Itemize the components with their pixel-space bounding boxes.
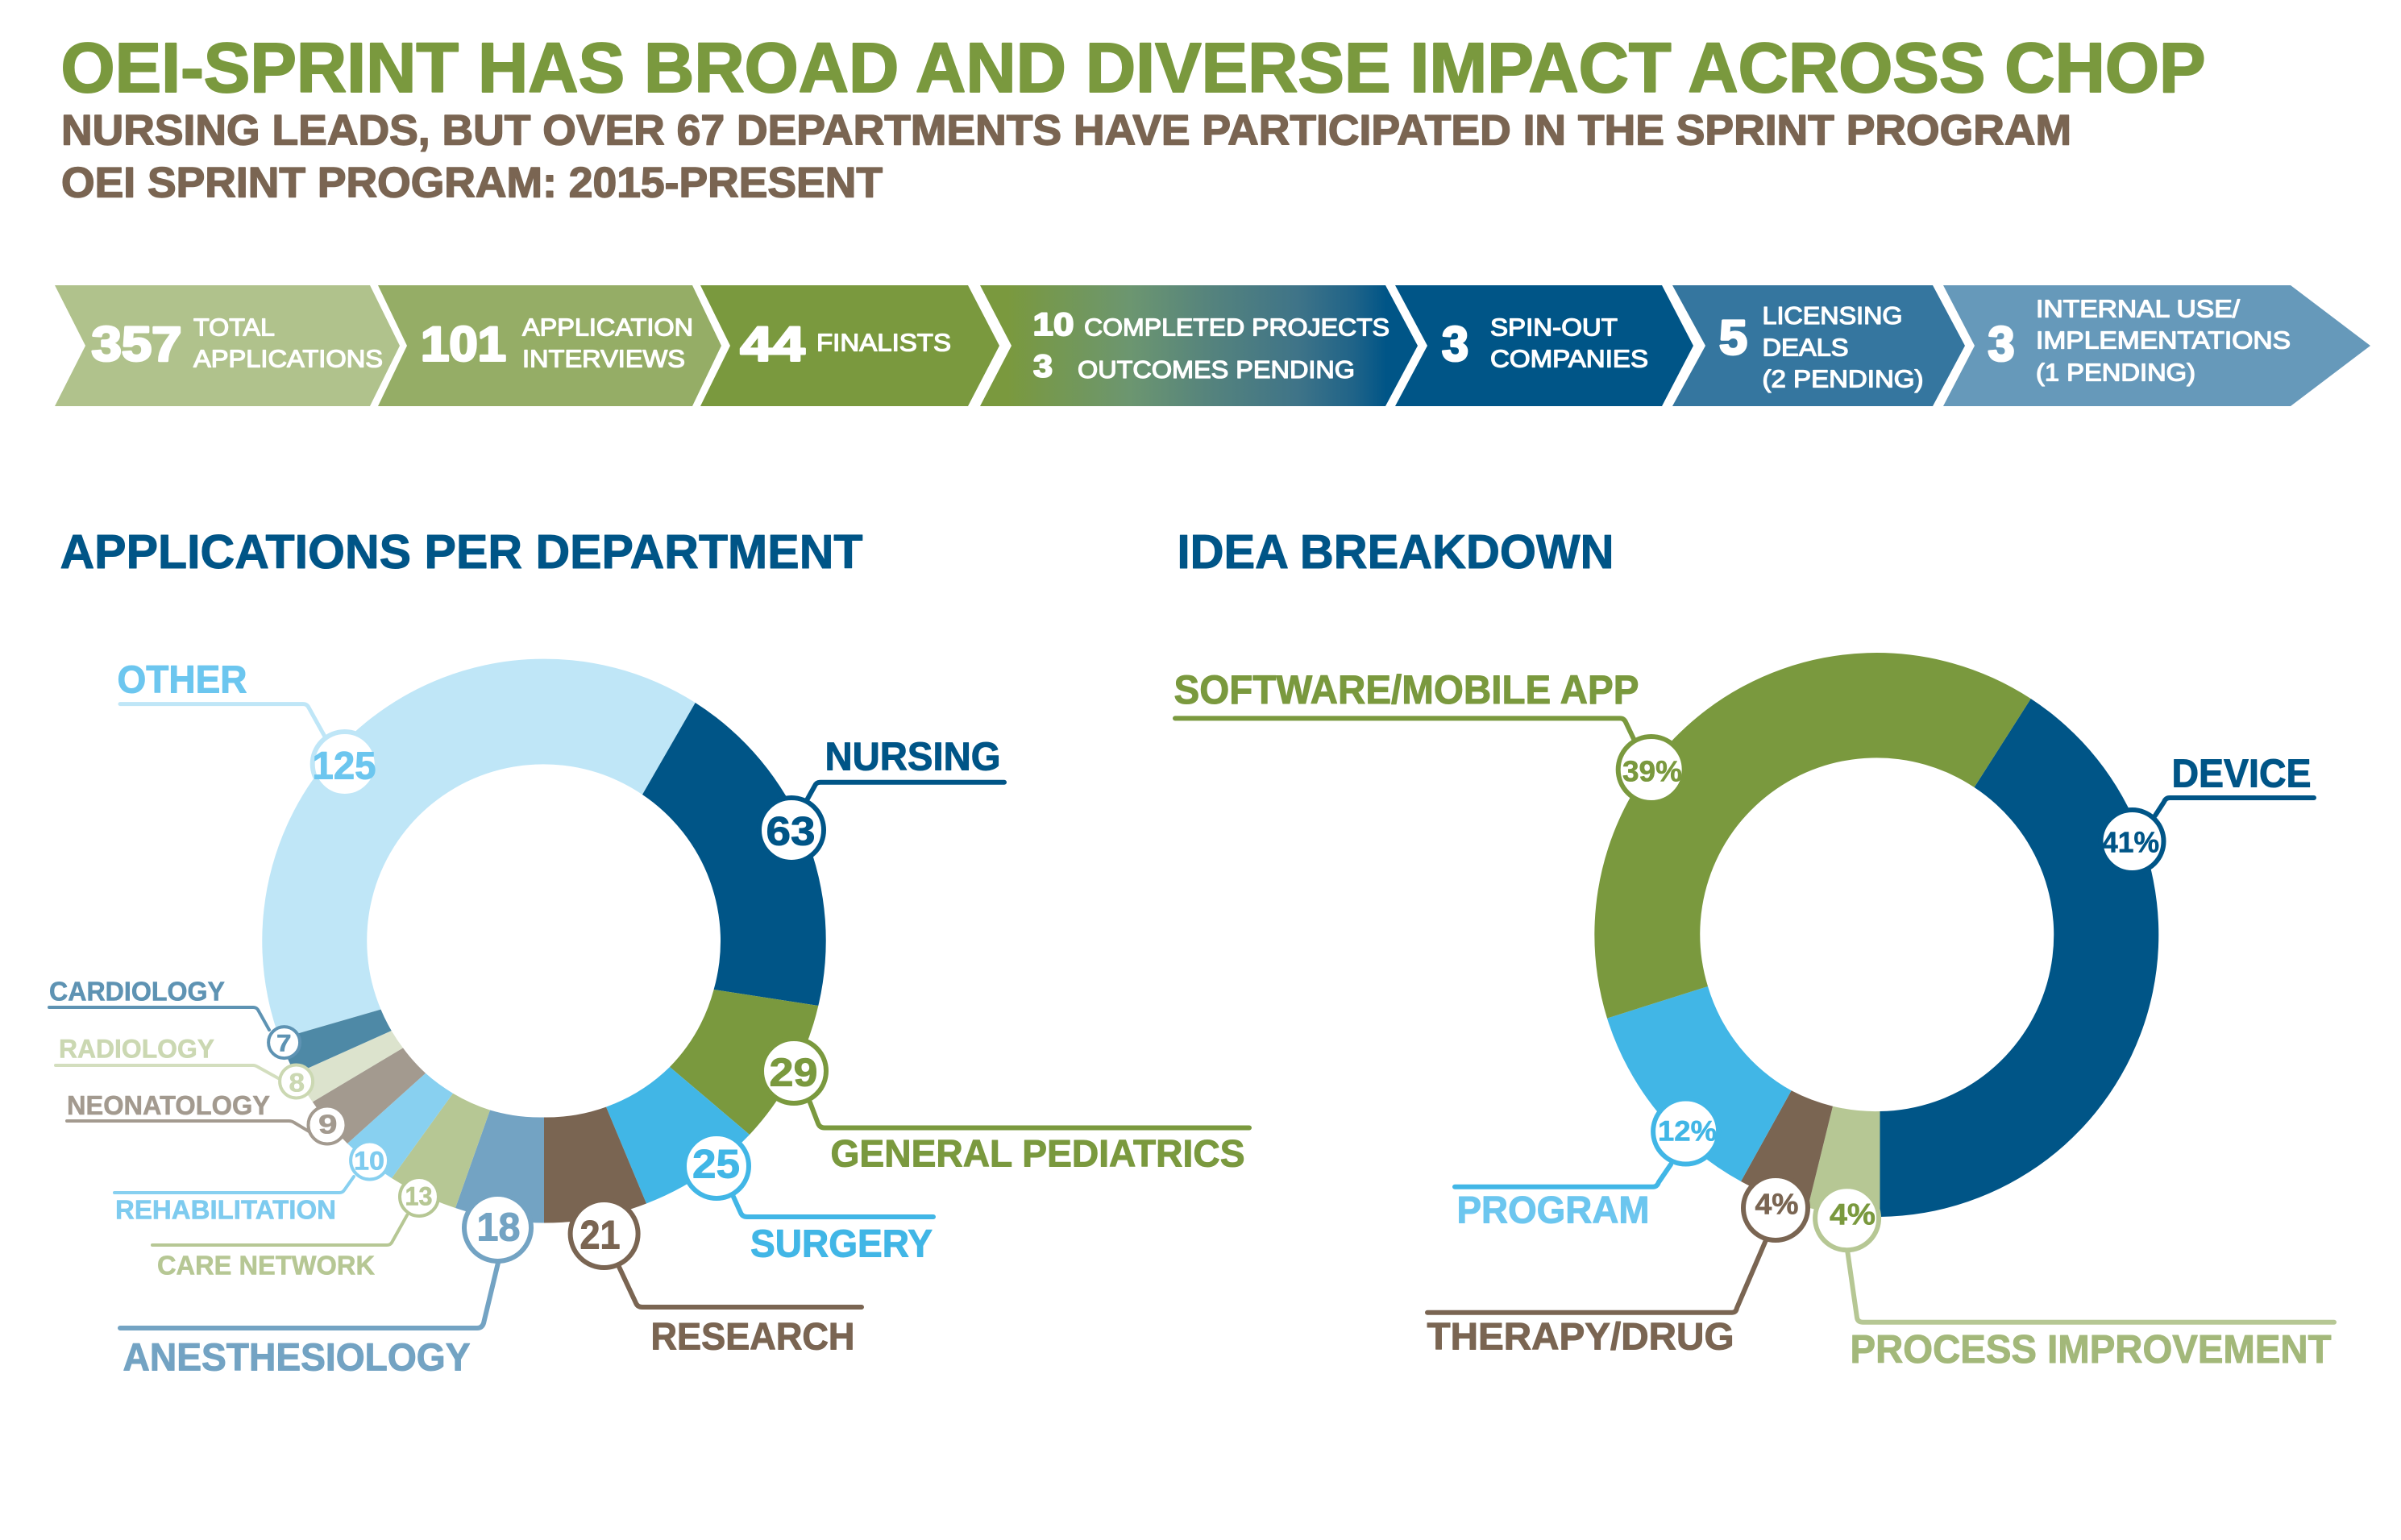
callout: program: PROGRAM bbox=[1457, 1188, 1649, 1231]
callout: radiology: RADIOLOGY bbox=[59, 1034, 214, 1063]
callout: surgery: SURGERY bbox=[750, 1223, 933, 1265]
chevron: completed projects bbox=[980, 285, 1418, 406]
chevron: finalists bbox=[700, 285, 999, 406]
callout: process improvement: 4% bbox=[1830, 1198, 1876, 1231]
chevron: spin-out companies: SPIN-OUT bbox=[1490, 313, 1618, 341]
callout: other: OTHER bbox=[118, 659, 247, 701]
chevron: finalists: FINALISTS bbox=[816, 328, 951, 356]
chevron: internal use bbox=[1943, 285, 2370, 406]
subtitle: NURSING LEADS, BUT OVER 67 DEPARTMENTS HAVE PARTICIPATED IN THE SPRINT PROGRAM bbox=[61, 106, 2071, 154]
chevron: completed projects: OUTCOMES PENDING bbox=[1078, 355, 1355, 384]
donut chart: idea breakdown bbox=[1594, 653, 2158, 1217]
segment: care network bbox=[392, 1094, 490, 1208]
callout: general pediatrics bbox=[762, 1039, 1249, 1175]
callout: general pediatrics: 29 bbox=[769, 1051, 817, 1094]
chevron: licensing deals bbox=[1672, 285, 1965, 406]
heading: applications per department: APPLICATIONS PER DEPARTMENT bbox=[60, 525, 862, 579]
callout: process improvement bbox=[1815, 1186, 2334, 1372]
callout: cardiology: 7 bbox=[276, 1031, 292, 1057]
segment: software/mobile app bbox=[1594, 653, 2031, 1019]
segment: therapy/drug bbox=[1741, 1090, 1833, 1207]
callout: rehabilitation: REHABILITATION bbox=[115, 1195, 336, 1225]
callout: device: 41% bbox=[2102, 826, 2159, 859]
chevron: internal use: 3 bbox=[1988, 318, 2015, 371]
segment: research bbox=[544, 1107, 646, 1223]
chevron: completed projects: COMPLETED PROJECTS bbox=[1084, 313, 1390, 341]
callout: anesthesiology bbox=[120, 1194, 531, 1380]
segment: device bbox=[1880, 699, 2158, 1217]
callout: nursing: 63 bbox=[766, 809, 816, 854]
chevron: total applications: 357 bbox=[92, 318, 182, 371]
callout: care network: CARE NETWORK bbox=[157, 1251, 375, 1281]
segment: cardiology bbox=[280, 1010, 392, 1074]
callout: therapy/drug: 4% bbox=[1755, 1187, 1799, 1220]
chevron: internal use: (1 PENDING) bbox=[2036, 358, 2195, 387]
chevron: internal use: IMPLEMENTATIONS bbox=[2036, 326, 2291, 354]
callout: care network: 13 bbox=[405, 1182, 432, 1211]
callout: general pediatrics: GENERAL PEDIATRICS bbox=[830, 1131, 1244, 1175]
callout: other bbox=[118, 659, 377, 796]
callout: anesthesiology: ANESTHESIOLOGY bbox=[123, 1336, 471, 1380]
chevron: total applications: APPLICATIONS bbox=[193, 344, 383, 372]
callout: surgery: 25 bbox=[692, 1141, 740, 1186]
callout: care network bbox=[152, 1177, 438, 1281]
callout: research: 21 bbox=[580, 1212, 621, 1257]
callout: neonatology bbox=[67, 1090, 347, 1144]
heading: idea breakdown: IDEA BREAKDOWN bbox=[1177, 525, 1614, 579]
chevron: licensing deals: (2 PENDING) bbox=[1762, 364, 1923, 393]
chevron: application interviews bbox=[378, 285, 721, 406]
callout: research: RESEARCH bbox=[651, 1315, 854, 1357]
segment: neonatology bbox=[313, 1048, 426, 1144]
callout: software/mobile app: 39% bbox=[1622, 755, 1682, 788]
chevron: total applications bbox=[55, 285, 400, 406]
segment: general pediatrics bbox=[670, 990, 818, 1135]
pipeline chevrons bbox=[55, 285, 2370, 406]
chevron: licensing deals: DEALS bbox=[1762, 333, 1849, 361]
callout: other: 125 bbox=[313, 745, 376, 788]
chevron: internal use: INTERNAL USE/ bbox=[2036, 294, 2240, 322]
callout: program: 12% bbox=[1658, 1115, 1717, 1147]
callout: surgery bbox=[684, 1134, 933, 1265]
callout: therapy/drug bbox=[1427, 1176, 1808, 1357]
callout: device bbox=[2100, 753, 2314, 873]
segment: rehabilitation bbox=[347, 1073, 453, 1178]
chevron: spin-out companies: 3 bbox=[1442, 318, 1468, 371]
chevron: completed projects: 3 bbox=[1033, 350, 1053, 384]
callout: software/mobile app bbox=[1173, 667, 1684, 803]
callout: program bbox=[1455, 1099, 1718, 1231]
title: OEI-SPRINT HAS BROAD AND DIVERSE IMPACT ACROSS CHOP bbox=[61, 29, 2205, 107]
callout: cardiology: CARDIOLOGY bbox=[49, 977, 225, 1007]
callout: anesthesiology: 18 bbox=[477, 1206, 521, 1249]
chevron: spin-out companies bbox=[1395, 285, 1693, 406]
callout: neonatology: 9 bbox=[318, 1110, 337, 1139]
chevron: licensing deals: LICENSING bbox=[1762, 301, 1902, 330]
callout: research bbox=[571, 1200, 862, 1357]
callout: radiology bbox=[56, 1034, 313, 1098]
segment: surgery bbox=[606, 1067, 750, 1204]
callout: nursing: NURSING bbox=[825, 735, 1001, 778]
chevron: licensing deals: 5 bbox=[1719, 311, 1747, 364]
segment: other bbox=[262, 659, 696, 1039]
callout: radiology: 8 bbox=[289, 1068, 305, 1097]
segment: nursing bbox=[642, 703, 826, 1006]
chevron: spin-out companies: COMPANIES bbox=[1490, 344, 1648, 372]
callout: software/mobile app: SOFTWARE/MOBILE APP bbox=[1173, 667, 1639, 712]
segment: radiology bbox=[295, 1031, 403, 1102]
callout: neonatology: NEONATOLOGY bbox=[67, 1090, 270, 1120]
callout: cardiology bbox=[49, 977, 300, 1058]
chevron: application interviews: APPLICATION bbox=[522, 313, 693, 341]
callout: rehabilitation bbox=[114, 1141, 388, 1225]
chevron: finalists: 44 bbox=[740, 318, 805, 371]
chevron: application interviews: INTERVIEWS bbox=[522, 344, 685, 372]
callout: process improvement: PROCESS IMPROVEMENT bbox=[1851, 1328, 2332, 1372]
donut chart: applications per department bbox=[262, 659, 826, 1223]
segment: anesthesiology bbox=[455, 1110, 544, 1223]
program period: OEI SPRINT PROGRAM: 2015-PRESENT bbox=[61, 159, 883, 206]
callout: nursing bbox=[759, 735, 1004, 862]
chevron: application interviews: 101 bbox=[421, 318, 506, 371]
segment: process improvement bbox=[1808, 1106, 1880, 1217]
callout: therapy/drug: THERAPY/DRUG bbox=[1427, 1315, 1734, 1357]
callout: device: DEVICE bbox=[2171, 753, 2312, 796]
segment: program bbox=[1607, 986, 1792, 1181]
chevron: completed projects: 10 bbox=[1033, 307, 1074, 342]
chevron: total applications: TOTAL bbox=[193, 313, 275, 341]
callout: rehabilitation: 10 bbox=[354, 1147, 384, 1176]
